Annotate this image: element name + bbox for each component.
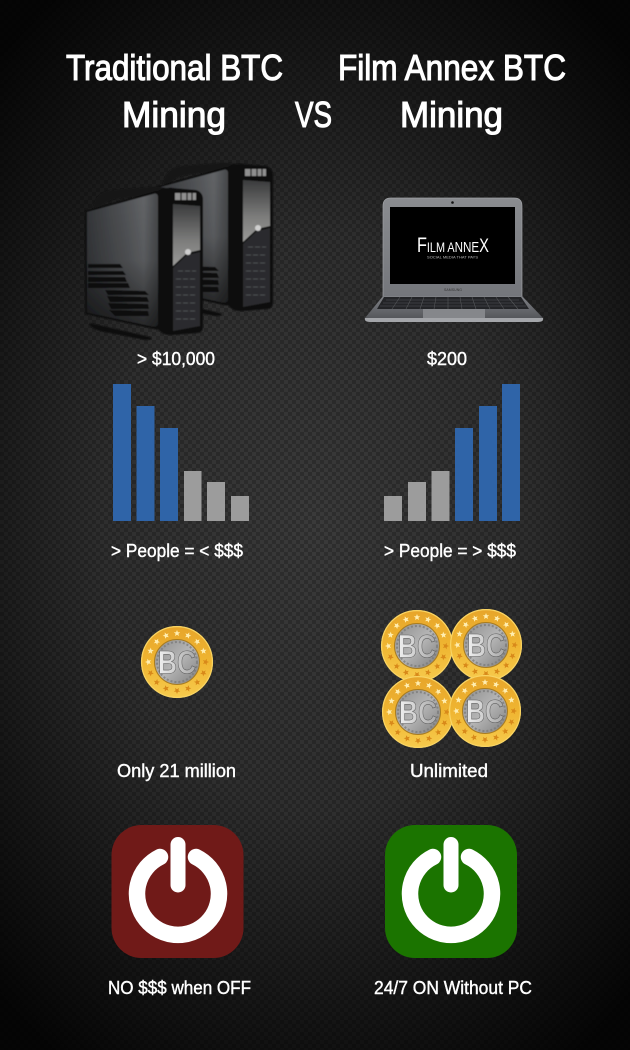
label: Unlimited: Unlimited [410, 761, 488, 781]
gray bars [184, 471, 249, 521]
icon: laptop [365, 198, 543, 322]
title: Traditional BTC Mining: Mining [122, 94, 226, 135]
icon: red power button [112, 825, 244, 958]
icon: four bitcoins: BC [467, 628, 505, 664]
label: 24/7 ON Without PC: 24/7 ON Without PC [374, 978, 532, 998]
label: > $10,000: > $10,000 [137, 349, 215, 369]
icon: laptop: SOCIAL MEDIA THAT PAYS [427, 254, 478, 260]
label: Only 21 million: Only 21 million [117, 761, 236, 781]
title: Traditional BTC Mining [66, 47, 283, 135]
title: Film Annex BTC Mining: Mining [400, 94, 503, 135]
icon: single bitcoin: BC [158, 644, 196, 680]
title: Film Annex BTC Mining [338, 47, 566, 135]
title: Traditional BTC Mining: Traditional BTC [66, 47, 283, 88]
icon: four bitcoins: BC [466, 694, 504, 730]
title: Film Annex BTC Mining: Film Annex BTC [338, 47, 566, 88]
label: > People = < $$$: > People = < $$$ [111, 541, 243, 561]
logo text: Film Annex: FILM ANNEX [417, 234, 489, 257]
icon: computer towers [85, 163, 273, 340]
gray bars [384, 471, 450, 521]
chart: more people, more money [384, 384, 520, 521]
icon: four bitcoins: BC [399, 694, 437, 730]
chart: more people, less money [113, 384, 249, 521]
icon: four bitcoins [381, 609, 522, 748]
label: $200: $200 [427, 349, 467, 369]
icon: single bitcoin [141, 626, 213, 698]
icon: green power button [385, 825, 517, 958]
icon: four bitcoins: BC [398, 628, 436, 664]
icon: laptop: SAMSUNG [444, 288, 462, 292]
blue bars [455, 384, 520, 521]
title: VS: VS [295, 94, 332, 135]
blue bars [113, 384, 178, 521]
label: > People = > $$$: > People = > $$$ [384, 541, 516, 561]
label: NO $$$ when OFF: NO $$$ when OFF [108, 978, 251, 998]
